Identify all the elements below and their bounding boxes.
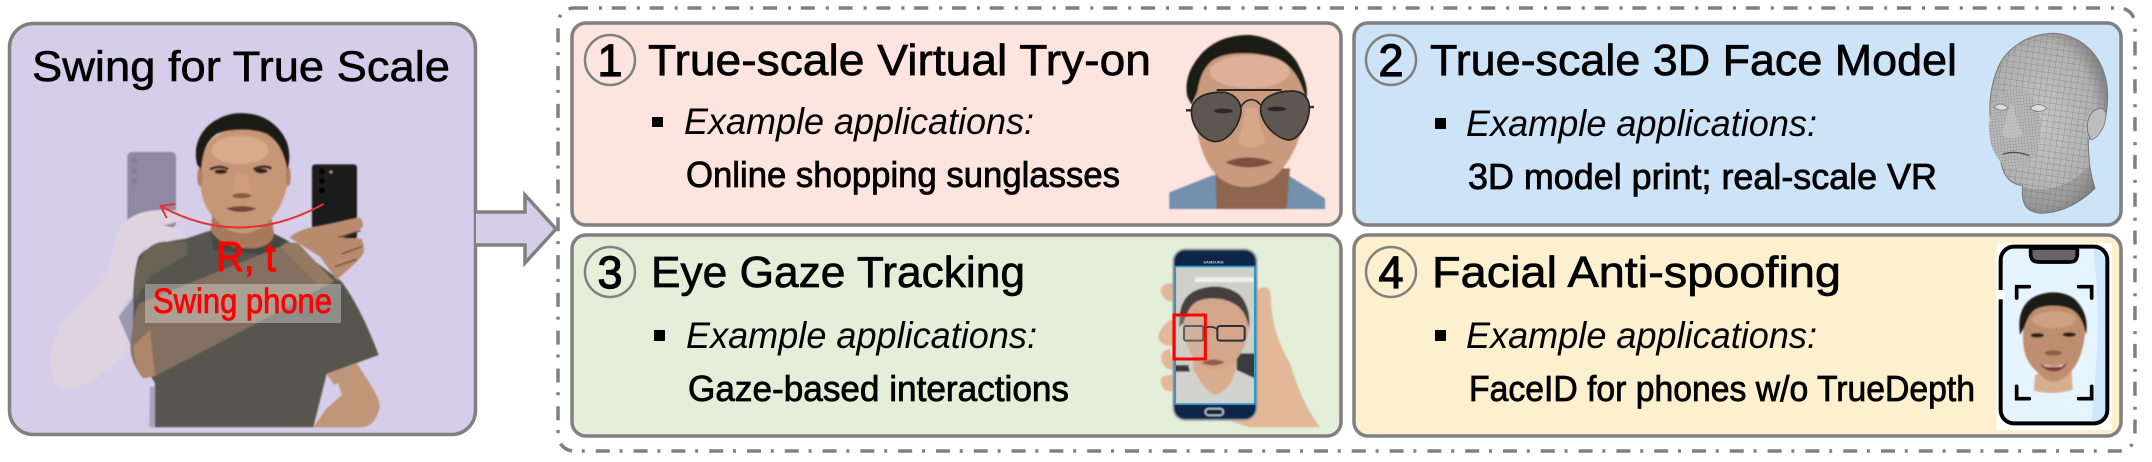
heading: Eye Gaze Tracking xyxy=(651,248,1025,297)
label: R, t: R, t xyxy=(216,233,276,280)
phone body xyxy=(1173,249,1257,420)
number 4: 4 xyxy=(1378,247,1404,298)
image: phone held in hand xyxy=(1158,249,1320,427)
image: phone held in hand: SAMSUNG xyxy=(1203,260,1224,265)
number 3 xyxy=(585,247,635,298)
bullet xyxy=(1435,330,1446,341)
example label: Example applications: xyxy=(1466,315,1817,356)
application: Gaze-based interactions xyxy=(688,368,1069,409)
number 4 xyxy=(1366,247,1416,298)
image: face id phone xyxy=(1997,243,2112,430)
image: face with sunglasses xyxy=(1169,35,1325,209)
ghost arm xyxy=(51,210,186,390)
hair xyxy=(196,113,289,170)
panel 1: true-scale virtual try-on xyxy=(572,23,1341,225)
example label: Example applications: xyxy=(686,315,1037,356)
arrow xyxy=(476,195,556,263)
panel 4: facial anti-spoofing xyxy=(1354,235,2121,436)
label: swing phone: Swing phone xyxy=(153,282,332,321)
bullet xyxy=(652,117,663,127)
number 3: 3 xyxy=(597,247,623,298)
shirt xyxy=(132,231,379,427)
image: 3d head mesh xyxy=(1989,33,2108,213)
heading: Facial Anti-spoofing xyxy=(1432,248,1841,297)
heading: swing for true scale: Swing for True Scale xyxy=(32,43,450,91)
phone in hand xyxy=(312,164,357,239)
head xyxy=(200,128,289,233)
illustration: person swinging a phone xyxy=(51,113,380,427)
number 2: 2 xyxy=(1378,35,1404,86)
bullet xyxy=(654,330,665,341)
number 1: 1 xyxy=(597,35,623,86)
ghost phone xyxy=(127,152,176,227)
number 1 xyxy=(585,35,635,86)
dashed frame xyxy=(558,8,2135,451)
application: FaceID for phones w/o TrueDepth xyxy=(1469,368,1975,409)
bullet xyxy=(1435,118,1446,129)
application: 3D model print; real-scale VR xyxy=(1468,156,1937,197)
red eye box xyxy=(1174,315,1205,359)
example label: Example applications: xyxy=(684,101,1034,142)
panel 3: eye gaze tracking xyxy=(572,235,1341,436)
number 2 xyxy=(1366,35,1416,86)
application: Online shopping sunglasses xyxy=(686,154,1120,195)
panel: swing for true scale xyxy=(10,24,476,434)
forearm xyxy=(131,243,334,378)
panel 2: true-scale 3d face model xyxy=(1354,23,2121,225)
elbow xyxy=(133,330,155,378)
right hand xyxy=(289,217,364,280)
swing arc xyxy=(161,204,324,227)
neck xyxy=(211,212,274,248)
example label: Example applications: xyxy=(1466,103,1817,144)
heading: True-scale 3D Face Model xyxy=(1430,36,1957,85)
heading: True-scale Virtual Try-on xyxy=(648,36,1151,85)
lower arm xyxy=(313,363,380,427)
